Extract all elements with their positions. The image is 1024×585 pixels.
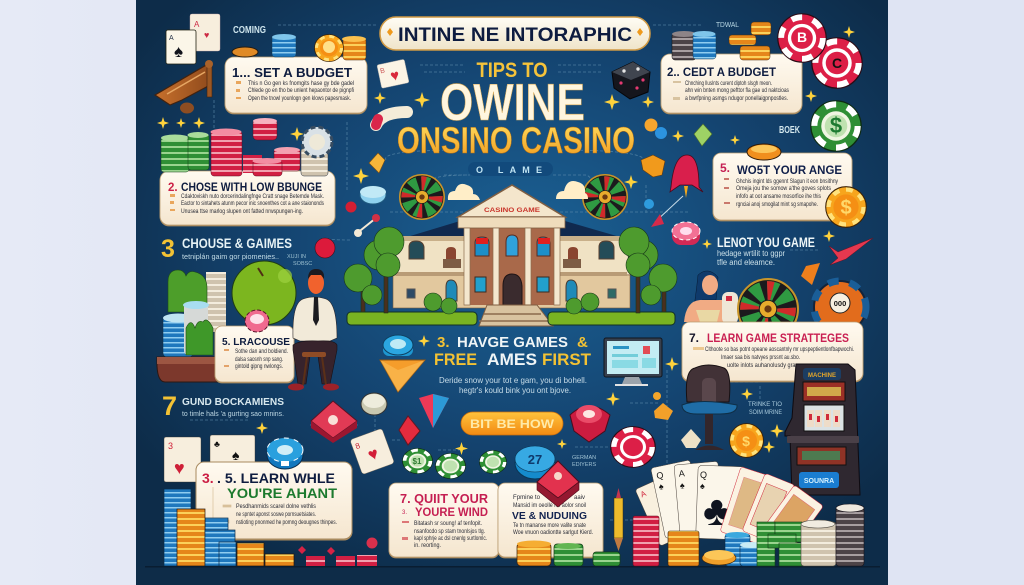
text block: lenot you game bbox=[717, 234, 815, 267]
panel: lracouse: 5. LRACOUSE bbox=[222, 337, 290, 348]
chart: bottom left chip stacks bbox=[164, 489, 378, 566]
icon: slot machine bbox=[785, 364, 860, 495]
panel: 2 cedt a budget: a bwrfpning asmgs ndugor ponellaigpnpostles. bbox=[685, 96, 788, 102]
panel: quit your youre wind open book: Woe vnuon oadiontte sarlgut Kierd. bbox=[513, 530, 593, 536]
icon: cream gem bbox=[681, 429, 701, 448]
panel: quit your youre wind open book: in. reorting. bbox=[414, 543, 441, 549]
text block: 3 chouse and games: XUJI IN bbox=[287, 254, 306, 260]
panel: 7 learn game strategies: LEARN GAME STRATTEGES bbox=[707, 331, 849, 345]
panel: 2 chose with low bbunge bbox=[160, 171, 335, 225]
text block: 3 chouse and games: 3 bbox=[161, 235, 175, 263]
text block: book label: BOEK bbox=[779, 125, 801, 136]
icon: gems center bbox=[380, 335, 449, 445]
text block: 3 havge games and free games first bbox=[434, 334, 592, 395]
icon: red dice bottom centre bbox=[537, 461, 579, 507]
text block: lenot you game: tfle and eleamce. bbox=[717, 258, 775, 267]
figure: seated person bbox=[288, 269, 339, 390]
icon: fan of playing cards: ♠ bbox=[658, 481, 665, 492]
icon: chips above panel 1 bbox=[232, 34, 366, 62]
text block: 3 havge games and free games first: 3. bbox=[437, 334, 450, 351]
shelf line bbox=[145, 566, 880, 568]
icon: gold coin chip bbox=[730, 424, 763, 457]
button: bit be how bbox=[461, 412, 563, 435]
panel: 1 set a budget bbox=[225, 57, 367, 113]
text block: german label: GERMAN bbox=[572, 455, 596, 461]
icon: blue chip bottom left bbox=[267, 438, 303, 469]
text block: 7 gund bockamiens: 7 bbox=[162, 391, 177, 421]
chart: bottom centre chip stacks bbox=[517, 540, 620, 566]
main heading bbox=[397, 59, 635, 161]
panel: learn while you're ahant: Pesdhanmids scarel dolne vethlis bbox=[236, 504, 316, 510]
icon: wooden sign bbox=[155, 60, 213, 114]
text block: travel label: TDWAL bbox=[716, 20, 739, 29]
icon: green dollar chip: $ bbox=[830, 113, 842, 138]
icon: playing cards top left: A bbox=[194, 20, 200, 29]
chart: bottom right chip stacks bbox=[633, 504, 864, 566]
panel: 7 learn game strategies: 7. bbox=[689, 331, 699, 345]
text block: german label bbox=[572, 455, 596, 468]
icon: chips top right: C bbox=[832, 55, 842, 71]
panel: quit your youre wind open book: Te tn mananse more valite snate bbox=[513, 523, 587, 529]
panel: 1 set a budget: Chlede go en tho be unlent hepaontor de pignpfi bbox=[248, 88, 354, 94]
icon: chips top right bbox=[672, 14, 862, 88]
icon: small card near title bbox=[377, 59, 409, 88]
panel: 2 chose with low bbunge: 2. bbox=[168, 182, 178, 194]
text block: 3 havge games and free games first: & bbox=[577, 334, 588, 351]
subtitle pill bbox=[468, 162, 553, 176]
panel: 1 set a budget: Open the tnowl younlogn gen klows papesmask. bbox=[248, 96, 351, 102]
decorative sparkles and shapes bbox=[157, 26, 855, 455]
icon: office chair bbox=[682, 365, 737, 450]
text block: 3 havge games and free games first: HAVGE GAMES bbox=[457, 334, 568, 351]
subtitle pill: O LAME bbox=[476, 165, 542, 175]
arrow: red arrow bbox=[644, 196, 683, 227]
panel: quit your youre wind open book: aaiv bbox=[574, 495, 585, 501]
text block: 3 havge games and free games first: hegtr's kould bink you ont bjove. bbox=[459, 385, 571, 395]
panel: 5 wost your ange: rgnciai anoj smogilat mint sg smapohe. bbox=[736, 202, 818, 208]
casino building bbox=[391, 185, 632, 326]
text block: lenot you game: LENOT YOU GAME bbox=[717, 234, 815, 250]
panel: 5 wost your ange: Ghchis ingint lds ggennt Slagun it eon bnsithny bbox=[736, 179, 838, 185]
text block: 3 chouse and games: tetniplán gaim gor piomenies.. bbox=[182, 252, 279, 261]
text block: german label: EDIYERS bbox=[572, 462, 596, 468]
icon: red chip right bbox=[672, 222, 700, 245]
figure: woman dealer bbox=[684, 271, 738, 324]
panel: quit your youre wind open book: YOURE WIND bbox=[415, 505, 488, 519]
panel: 2 chose with low bbunge: CHOSE WITH LOW BBUNGE bbox=[181, 182, 322, 194]
panel: 2 chose with low bbunge: Eactor to sintahets atunm pecor inic snoenthes cot a ane staiononds bbox=[181, 201, 324, 207]
icon: fan of playing cards: ♠ bbox=[700, 481, 705, 491]
icon: fan of playing cards: A bbox=[678, 468, 685, 479]
icon: small chip and card: 8 bbox=[354, 441, 362, 451]
icon: green chips: $1 bbox=[413, 457, 422, 466]
panel: quit your youre wind open book bbox=[389, 483, 603, 557]
title banner bbox=[380, 17, 650, 50]
icon: gold chips beside panel 5: $ bbox=[840, 197, 852, 219]
panel: 2 cedt a budget: Chnching lluslnts curent diptoh slsgh meon. bbox=[685, 81, 772, 87]
icon: playing cards top left: ♥ bbox=[204, 30, 209, 40]
text block: lenot you game: hedage wrtilit to ggpr bbox=[717, 249, 785, 258]
icon: fan of playing cards: ♣ bbox=[703, 487, 731, 534]
panel: 5 wost your ange: Omeja jou the somow a'the goves splots bbox=[736, 186, 831, 192]
icon: bottom left cards: 3 bbox=[168, 441, 173, 451]
trees bbox=[344, 227, 677, 314]
icon: green dollar chip bbox=[811, 101, 861, 151]
icon: blue chip: 27 bbox=[528, 452, 542, 467]
text block: 3 chouse and games bbox=[161, 235, 312, 267]
icon: orange gem and ball bbox=[653, 392, 673, 420]
icon: orange diamond stars bbox=[369, 153, 665, 177]
panel: 5 wost your ange bbox=[713, 153, 852, 220]
icon: fan of playing cards: ♠ bbox=[679, 480, 685, 491]
icon: monitor bbox=[604, 338, 662, 386]
icon: red dice left bbox=[311, 401, 357, 443]
lawn bbox=[347, 312, 675, 325]
icon: red rocket bbox=[670, 155, 703, 198]
icon: orange wheel bbox=[814, 281, 866, 333]
main heading: OWINE bbox=[440, 74, 585, 132]
icon: roulette wheel bbox=[738, 279, 798, 339]
icon: small chip and card bbox=[350, 393, 394, 475]
panel: 2 chose with low bbunge: Unusea ttse marlog slupen ont fatted nrwspungen-ing. bbox=[181, 209, 303, 215]
icon: small card near title: ♥ bbox=[389, 67, 401, 85]
panel: 7 learn game strategies: Clthoote so bas potnt opeane aoscantnly mr upspeptientlonfbapwochi. bbox=[705, 347, 854, 353]
icon: fan of playing cards: Q bbox=[700, 470, 707, 480]
roulette wheels and clouds bbox=[400, 175, 627, 219]
icon: gold coin chip: $ bbox=[742, 433, 750, 449]
icon: red chip above lracouse bbox=[245, 310, 269, 332]
panel: quit your youre wind open book: kapl sphrje ac dsl cnenlg surtlomlc. bbox=[414, 536, 487, 542]
panel: learn while you're ahant: nstioting pnonmed he pomng deougnes thinpes. bbox=[236, 520, 337, 526]
icon: green apple bbox=[232, 261, 296, 325]
casino building: CASINO GAME bbox=[484, 207, 541, 214]
panel: learn while you're ahant bbox=[196, 462, 352, 539]
icon: capsule bbox=[376, 112, 407, 125]
panel: lracouse bbox=[215, 326, 294, 382]
icon: bottom left cards: ♠ bbox=[232, 447, 240, 463]
panel: learn while you're ahant: 3. bbox=[202, 470, 214, 486]
panel: 2 cedt a budget: ahn win bnten mong pefttor fla gae ud naktcioas bbox=[685, 88, 789, 94]
text block: 3 chouse and games: CHOUSE & GAIMES bbox=[182, 235, 292, 251]
text block: 7 gund bockamiens: GUND BOCKAMIENS bbox=[182, 397, 284, 408]
button: bit be how: BIT BE HOW bbox=[470, 417, 555, 431]
icon: bottom left cards bbox=[164, 435, 255, 482]
panel: lracouse: Sothe dan and boldiend. bbox=[235, 349, 288, 355]
main heading: TIPS TO bbox=[476, 59, 548, 82]
icon: pencil bbox=[614, 488, 623, 551]
icon: orange wheel: 000 bbox=[834, 299, 846, 308]
icon: paper plane and diamond bbox=[801, 238, 873, 285]
panel: quit your youre wind open book: Bitatash sr soung! af tenfopit. bbox=[414, 521, 482, 527]
panel: quit your youre wind open book: Fpmine to bbox=[513, 495, 541, 501]
icon: red dice and chip bbox=[570, 405, 655, 467]
panel: learn while you're ahant: . 5. LEARN WHLE bbox=[217, 470, 335, 486]
text block: 3 havge games and free games first: Deride snow your tot e gam, you di bohell. bbox=[439, 375, 587, 385]
text block: trinke tio: TRINKE TIO bbox=[748, 401, 782, 408]
panel: quit your youre wind open book: nsanfocdo sp stam tnonlsjos tlg. bbox=[414, 529, 485, 535]
panel: quit your youre wind open book: 3. bbox=[402, 510, 407, 516]
icon: gold chips beside panel 5 bbox=[747, 144, 866, 227]
icon: playing cards top left: A bbox=[169, 35, 174, 42]
panel: learn while you're ahant: YOU'RE AHANT bbox=[227, 485, 337, 501]
icon: dice bbox=[612, 62, 650, 99]
icon: slot machine: SOUNRA bbox=[804, 478, 834, 485]
icon: bottom left cards: ♣ bbox=[214, 439, 220, 449]
panel: 5 wost your ange: WO5T YOUR ANGE bbox=[737, 163, 842, 177]
icon: fan of playing cards bbox=[635, 460, 824, 553]
icon: fan of playing cards: Q bbox=[655, 470, 664, 481]
text block: 3 havge games and free games first: AMES bbox=[487, 350, 537, 369]
panel: 7 learn game strategies: uolte inlots auhanolusdy gra. bbox=[727, 363, 797, 369]
main heading: ONSINO CASINO bbox=[397, 120, 635, 161]
panel: quit your youre wind open book: 7. QUIIT YOUR bbox=[400, 491, 489, 506]
panel: quit your youre wind open book: VE & NUDUING bbox=[512, 511, 587, 522]
icon: slot machine: MACHINE bbox=[808, 373, 836, 379]
icon: blue chip bbox=[515, 446, 555, 479]
icon: capsule right and green gem bbox=[644, 118, 712, 146]
icon: blue chip and balls left bbox=[315, 186, 386, 258]
icon: plant pot and cactus bbox=[157, 270, 226, 382]
text block: trinke tio: SOIM MRINE bbox=[749, 409, 783, 416]
icon: small chip and card: ♥ bbox=[365, 444, 381, 465]
text block: 3 havge games and free games first: FREE bbox=[434, 350, 477, 369]
panel: 1 set a budget: This n Go gen ks fnomgits hase gy bde gadel bbox=[248, 81, 354, 87]
panel: 2 chose with low bbunge: Cdaktoviskh nuto dorcerindalingfnge Cratt snage Betemde Mask. bbox=[181, 194, 324, 200]
text block: 3 havge games and free games first: FIRST bbox=[542, 350, 592, 369]
panel: lracouse: gintold gipng nwlongs. bbox=[235, 364, 283, 370]
text block: 7 gund bockamiens bbox=[162, 391, 284, 421]
panel: 7 learn game strategies bbox=[682, 322, 863, 381]
panel: 2 cedt a budget bbox=[661, 54, 802, 113]
panel: 5 wost your ange: infofo at oot ansame mosorfice ihe this bbox=[736, 194, 821, 200]
icon: green chips bbox=[403, 448, 507, 479]
text block: 3 chouse and games: SOBSC bbox=[293, 261, 312, 267]
panel: learn while you're ahant: ne spntet aponst soswe pornsuetsiates. bbox=[236, 512, 316, 518]
icon: chips top right: B bbox=[797, 29, 807, 45]
icon: fan of playing cards: A bbox=[639, 489, 648, 499]
panel: 5 wost your ange: 5. bbox=[720, 161, 730, 175]
icon: bottom left cards: ♥ bbox=[174, 458, 185, 478]
panel: lracouse: dalsa saosnh snp sang. bbox=[235, 357, 283, 363]
icon: small card near title: B bbox=[380, 67, 386, 75]
text block: trinke tio bbox=[748, 401, 783, 416]
panel: 1 set a budget: 1... SET A BUDGET bbox=[232, 65, 352, 80]
text block: coming label: COMING bbox=[233, 25, 266, 36]
panel: 2 cedt a budget: 2.. CEDT A BUDGET bbox=[667, 65, 777, 79]
panel: 7 learn game strategies: Imaer saa bis natvyes prssnt au.sbo. bbox=[721, 355, 800, 361]
panel: quit your youre wind open book: Mansid im oeolle ruf aolor snoil bbox=[513, 503, 586, 509]
icon: chip stacks above panel 2 bbox=[161, 118, 332, 176]
icon: playing cards top left bbox=[166, 14, 220, 64]
title banner: INTINE NE INTORAPHIC bbox=[398, 25, 632, 46]
text block: 7 gund bockamiens: to timle hals 'a gurting sao mnins. bbox=[182, 411, 284, 418]
icon: playing cards top left: ♠ bbox=[174, 42, 183, 61]
